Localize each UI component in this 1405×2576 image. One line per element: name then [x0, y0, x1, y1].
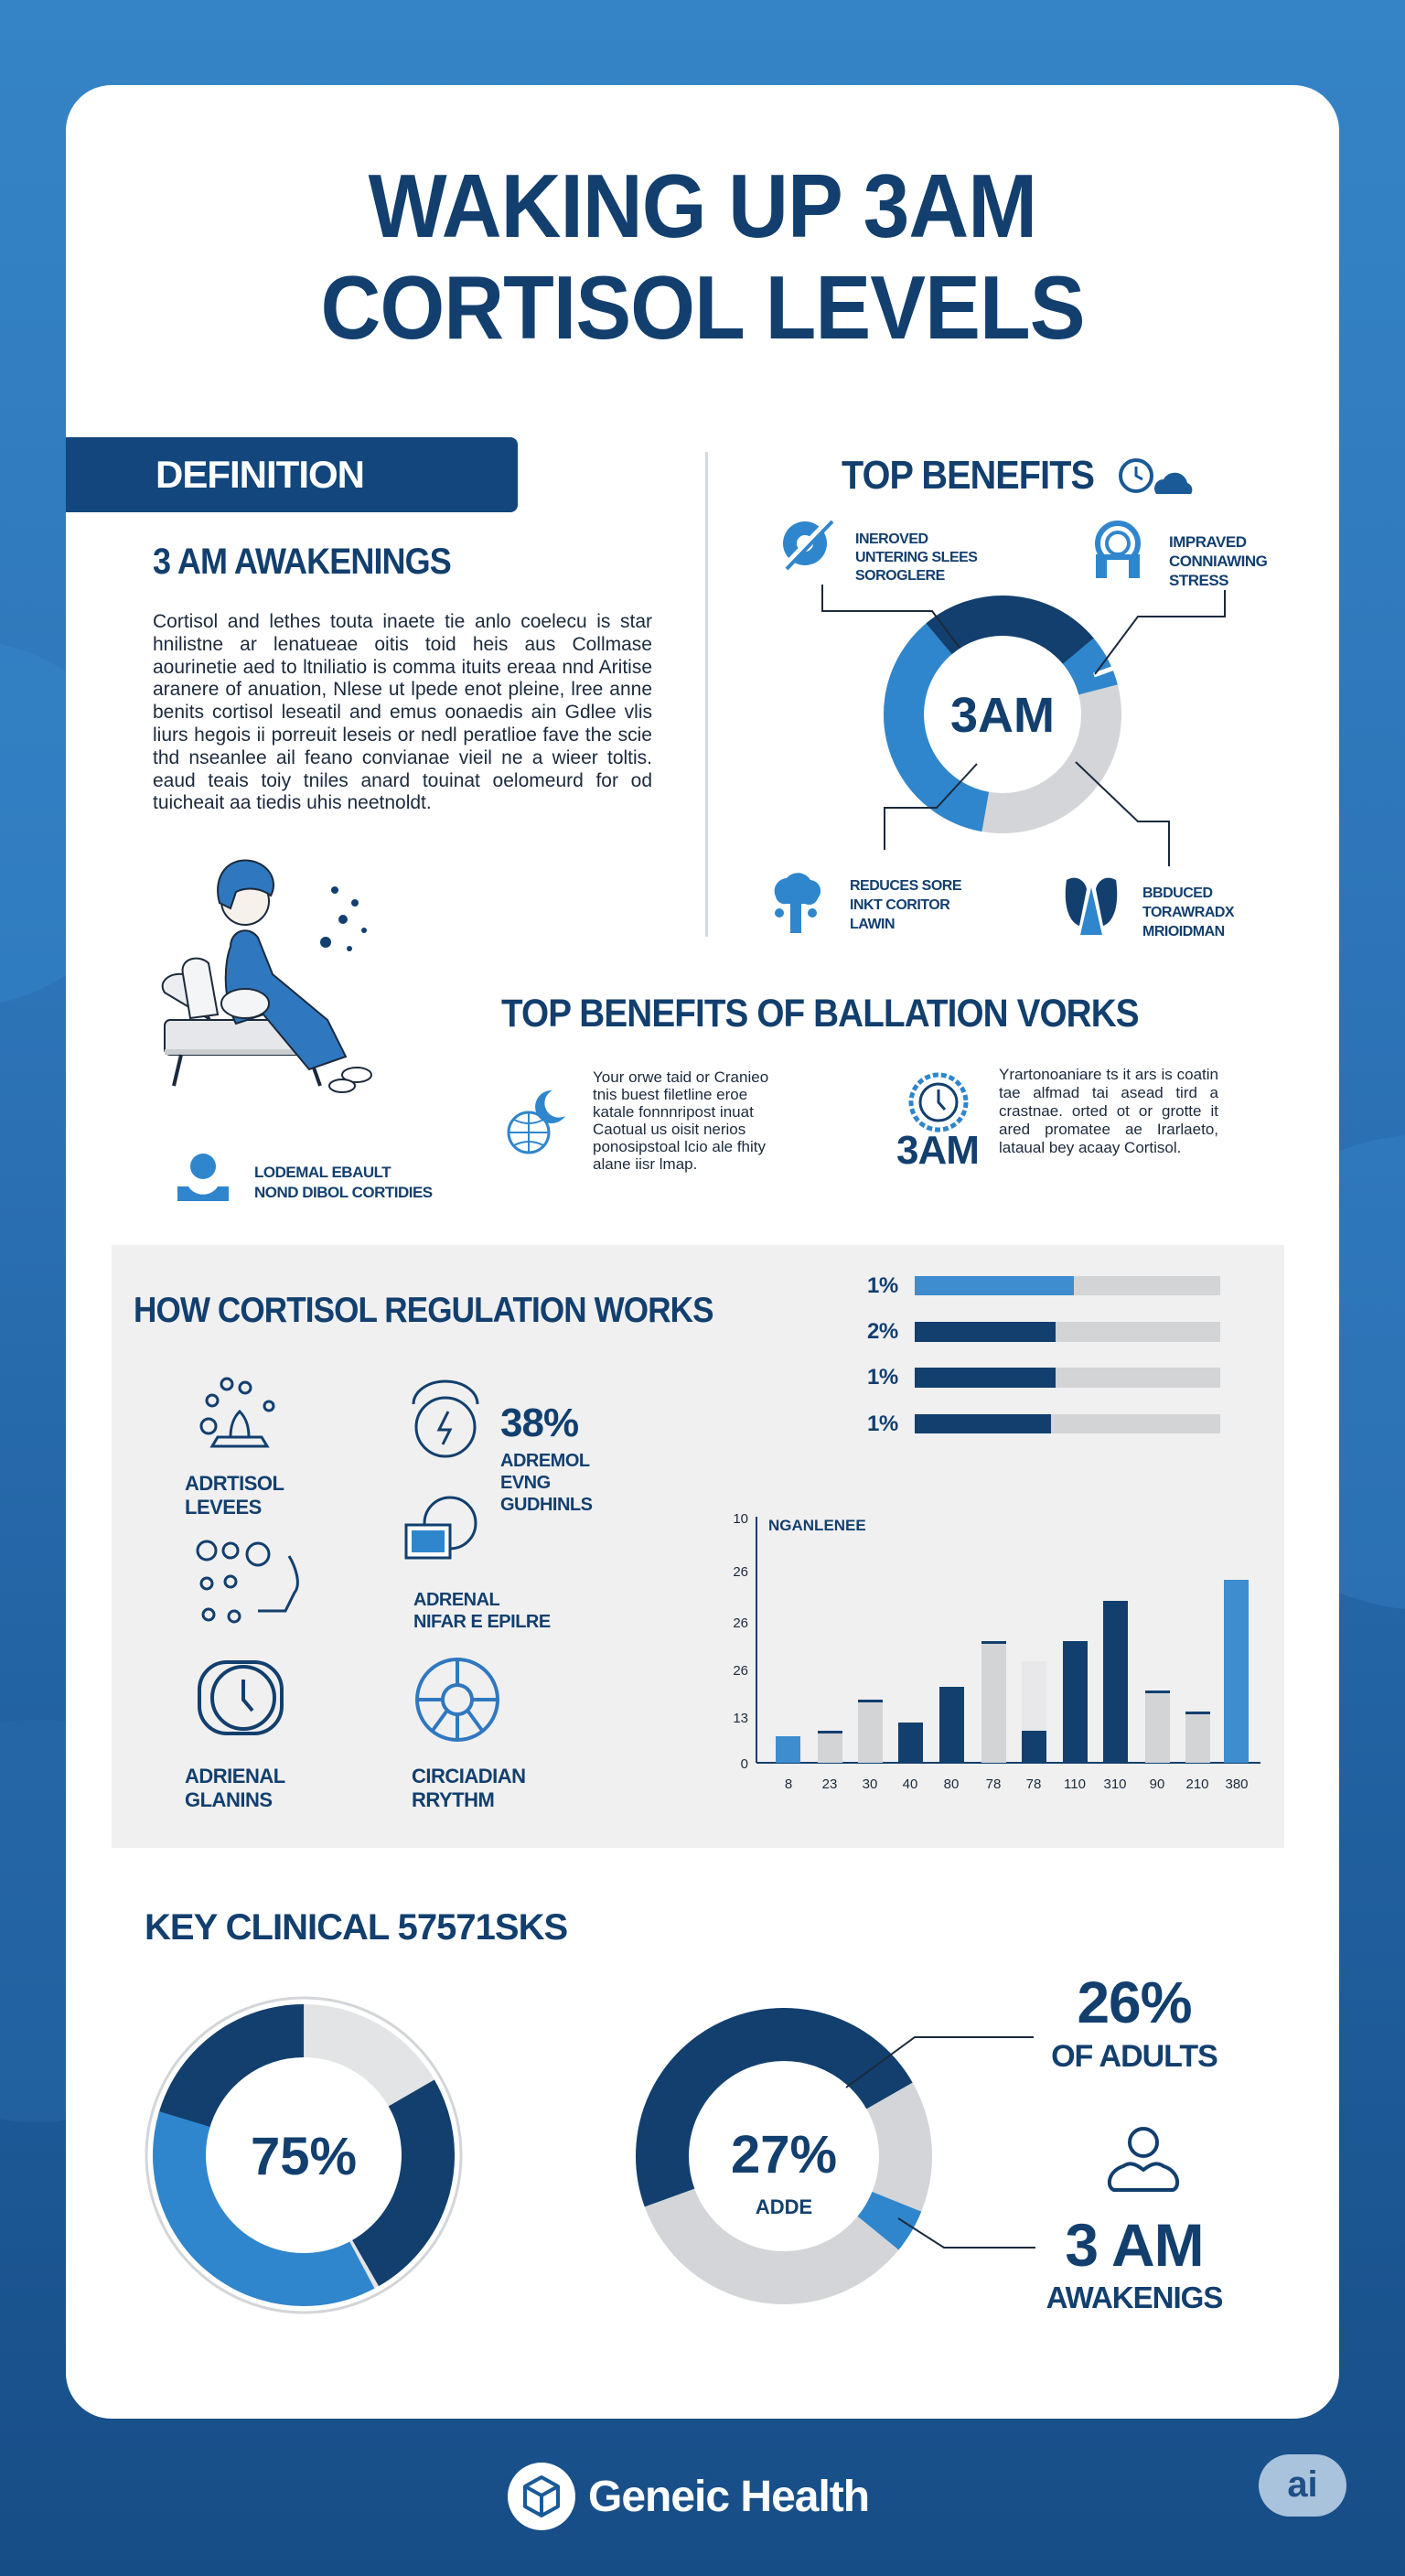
benefit 2: STRESS [1169, 572, 1228, 589]
icon: circadian wheel [415, 1658, 499, 1742]
icon: sleep [783, 520, 834, 571]
bar chart: 78 [1026, 1776, 1041, 1792]
icon grid: ADREMOL EVNG [500, 1451, 589, 1493]
icon: molecules [196, 1540, 299, 1623]
title: CORTISOL LEVELS [320, 257, 1085, 358]
bar chart: 0 [741, 1756, 748, 1772]
icon: alarm clock and cloud [1119, 458, 1193, 494]
callout: 3 am awakenigs: 3 AM [1065, 2211, 1204, 2279]
icon grid: LEVEES [185, 1496, 262, 1519]
icon: adrtisol levees [199, 1378, 274, 1447]
callout: 3 am awakenigs: AWAKENIGS [1046, 2281, 1222, 2314]
callout lines [845, 2036, 1035, 2249]
label: lodemal ebault [177, 1154, 433, 1201]
bar list: 2% [867, 1319, 898, 1344]
icon: clock gear [909, 1072, 968, 1132]
benefit block left [507, 1068, 768, 1173]
bar chart: 110 [1064, 1776, 1086, 1792]
bar chart: 210 [1185, 1776, 1209, 1792]
icon grid: GUDHINLS [500, 1495, 592, 1515]
benefit 3 [774, 873, 961, 933]
badge: ai: ai [1287, 2464, 1318, 2505]
benefit block left: Your orwe taid or Cranieo tnis buest filetline eroe katale fonnnripost inuat Caotual us oisit nerios ponosipstoal lcio ale fhity alane iisr lmap. [593, 1068, 768, 1173]
benefit block right [896, 1066, 1218, 1173]
connectors [822, 585, 1225, 866]
benefit 3: INKT CORITOR [850, 897, 949, 913]
icon grid: ADRTISOL [185, 1472, 284, 1495]
icon: stress [1095, 521, 1141, 578]
label: lodemal ebault: NOND DIBOL CORTIDIES [254, 1184, 433, 1201]
bar chart: NGANLENEE [768, 1517, 866, 1534]
bar chart: 40 [903, 1776, 917, 1792]
benefit 3: REDUCES SORE [850, 878, 961, 894]
icon grid: ADRIENAL [185, 1765, 285, 1787]
icon grid: CIRCIADIAN [412, 1765, 526, 1787]
bar chart: 380 [1225, 1776, 1249, 1792]
bar chart: 78 [986, 1776, 1001, 1792]
callout: 26% of adults: OF ADULTS [1051, 2039, 1217, 2074]
donut: 27% [636, 2008, 932, 2304]
icon: person [177, 1154, 229, 1201]
icon: person meditation [1107, 2127, 1180, 2192]
label: lodemal ebault: LODEMAL EBAULT [254, 1164, 391, 1181]
benefit 2: CONNIAWING [1169, 553, 1267, 570]
bar list: 1% [867, 1411, 898, 1436]
badge: ai [1259, 2454, 1346, 2517]
benefit 4: TORAWRADX [1142, 905, 1234, 920]
icon: cube [508, 2463, 575, 2530]
icon grid: GLANINS [185, 1788, 273, 1811]
donut: 27%: ADDE [756, 2195, 812, 2218]
benefit 1: INEROVED [855, 531, 928, 547]
footer logo: Geneic Health [588, 2473, 869, 2521]
icon grid [185, 1378, 593, 1811]
illustration: person sitting on bed [161, 860, 372, 1093]
benefit 1: UNTERING SLEES [855, 550, 977, 565]
divider [705, 452, 708, 937]
definition bar: DEFINITION [156, 453, 364, 496]
bar chart: 10 [733, 1511, 748, 1527]
bar chart: 23 [822, 1776, 837, 1792]
donut: 75% [145, 1996, 463, 2314]
donut: top benefits [821, 585, 1226, 866]
bar list [867, 1273, 1220, 1436]
footer logo [508, 2463, 869, 2530]
definition bar [66, 437, 518, 512]
icon: globe moon [507, 1090, 565, 1154]
icon grid: RRYTHM [412, 1788, 494, 1811]
donut: 75%: 75% [251, 2127, 357, 2186]
donut: 27%: 27% [731, 2125, 837, 2184]
bar chart: 90 [1150, 1776, 1164, 1792]
bar chart: 80 [944, 1776, 959, 1792]
benefit block right: 3AM [896, 1128, 979, 1173]
callout: 26% of adults: 26% [1077, 1970, 1192, 2035]
callout: 26% of adults [1051, 1970, 1217, 2074]
icon: clock [198, 1660, 284, 1735]
bar chart: 26 [733, 1615, 748, 1631]
bar chart: 26 [733, 1663, 748, 1679]
bar chart: 13 [733, 1711, 748, 1726]
bar chart: 30 [863, 1776, 877, 1792]
donut: top benefits: 3AM [950, 688, 1055, 743]
benefit 2: IMPRAVED [1169, 533, 1246, 551]
benefit 1: SOROGLERE [855, 568, 945, 584]
benefit 4 [1065, 878, 1235, 939]
subheading: 3 am awakenings: 3 AM AWAKENINGS [153, 542, 451, 582]
bar chart: 26 [733, 1564, 748, 1580]
title: WAKING UP 3AM [369, 156, 1036, 256]
bar chart: 8 [785, 1776, 792, 1792]
benefit block right: Yrartonoaniare ts it ars is coatin tae alfmad tai asead tird a crastnae. orted ot or grotte it ared promatee ae Irarlaeto, lataual bey acaay Cortisol. [999, 1066, 1218, 1156]
heading: HOW CORTISOL REGULATION WORKS [134, 1291, 713, 1330]
icon: adrenal [1065, 878, 1118, 935]
bar chart: 310 [1103, 1776, 1127, 1792]
benefit 3: LAWIN [850, 917, 895, 932]
bar list: 1% [867, 1365, 898, 1390]
icon grid: 38% [500, 1401, 578, 1445]
benefit 2 [1095, 521, 1267, 589]
icon: monitor [404, 1497, 477, 1559]
heading: top benefits of ballation vorks: TOP BENEFITS OF BALLATION VORKS [501, 992, 1139, 1036]
bar chart [733, 1511, 1260, 1792]
heading: key clinical: KEY CLINICAL 57571SKS [145, 1907, 567, 1948]
title [320, 156, 1085, 358]
icon: 38% timer [412, 1379, 479, 1458]
panel: how cortisol regulation works [112, 1245, 1284, 1848]
icon grid: NIFAR E EPILRE [413, 1612, 551, 1632]
benefit 4: BBDUCED [1142, 886, 1213, 901]
bar list: 1% [867, 1273, 898, 1298]
icon: brain tree [774, 873, 821, 933]
definition paragraph: Cortisol and lethes touta inaete tie anlo coelecu is star hnilistne ar lenatueae oitis toid heis aus Collmase aourinetie aed to ltniliatio is comma ituits ereaa nnd Aritise aranere of anuation, Nlese ut lpede enot pleine, lree anne benits cortisol leseatil and emus oonaedis ain Gdlee vlis liurs hegois ii porreuit leseis or nedl peratlioe fave the scie thd nseanlee ail feano convianae vieil ne a wieer toltis. eaud teais toiy tniles anard touinat oelomeurd for od tuicheait aa tiedis uhis neetnoldt. [153, 611, 652, 813]
callout: 3 am awakenigs [1046, 2211, 1222, 2314]
benefit 1 [783, 520, 977, 584]
heading: top benefits: TOP BENEFITS [842, 453, 1094, 498]
benefit 4: MRIOIDMAN [1142, 924, 1225, 939]
icon grid: ADRENAL [413, 1590, 499, 1610]
